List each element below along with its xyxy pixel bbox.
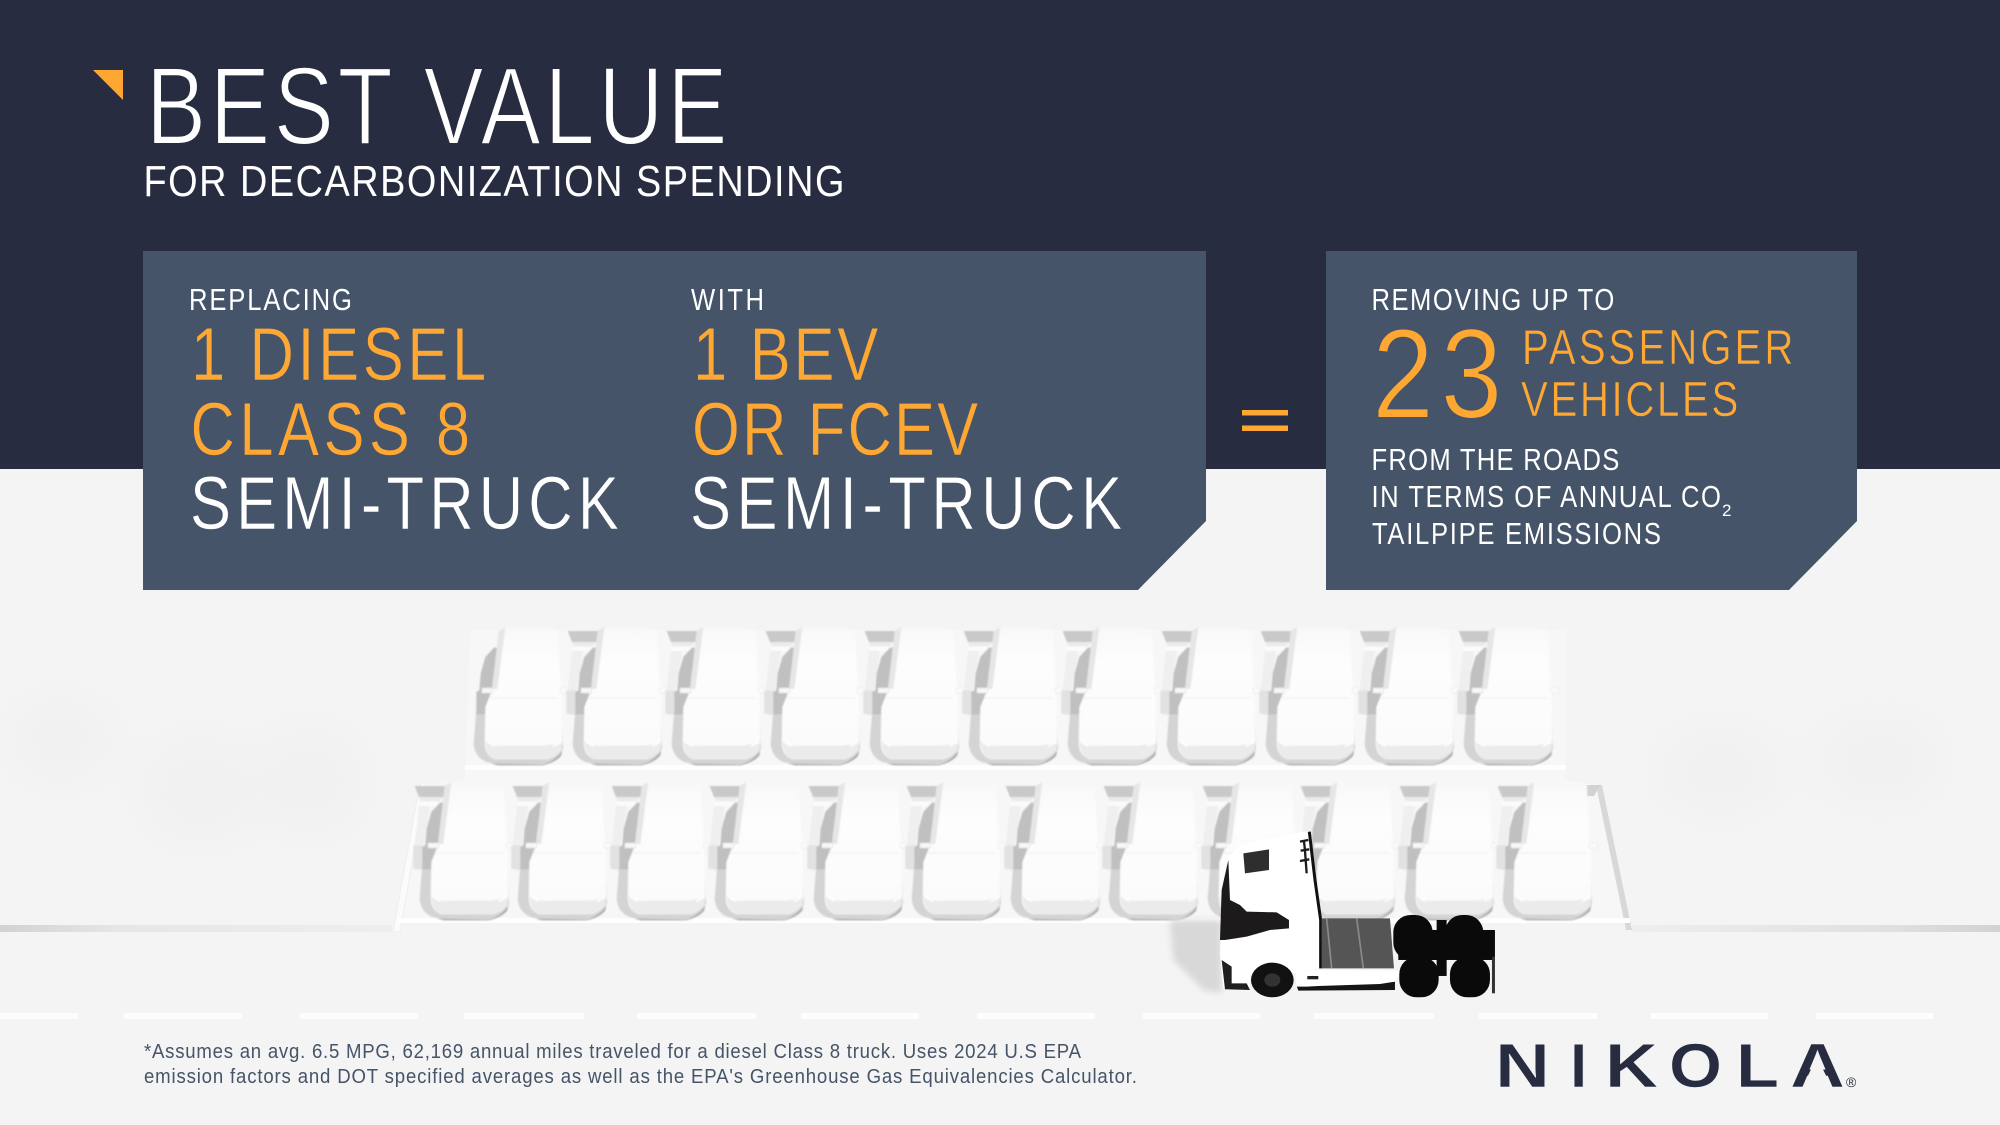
passenger vehicles [1521,320,1793,427]
diesel truck heading: SEMI-TRUCK [190,461,619,545]
ground haze texture [10,700,1940,840]
passenger vehicles: VEHICLES [1521,372,1738,427]
road lane dashes [0,1013,1933,1019]
label: removing up to: REMOVING UP TO [1372,283,1614,316]
description text: IN TERMS OF ANNUAL CO [1372,480,1721,513]
chassis [1295,970,1402,991]
front wheel [1251,963,1294,997]
logo: Nikola wordmark: ® [1846,1074,1857,1090]
truck cab [1220,832,1319,990]
parked cars: bottom row [413,782,1598,920]
truck ground shadow [1170,920,1222,993]
rear tires and axles [1393,915,1495,997]
cab vent marks [1300,840,1309,873]
logo: Nikola wordmark: O [1669,1032,1722,1101]
cab dark side [1220,860,1289,940]
parked cars: top row [474,627,1559,765]
BEV or FCEV truck heading: SEMI-TRUCK [690,461,1122,545]
logo: Nikola wordmark: N [1495,1032,1550,1101]
footnote: *Assumes an avg. 6.5 MPG, 62,169 annual miles traveled for a diesel Class 8 truck. Uses 2024 U.S EPA [144,1041,1081,1063]
description text: FROM THE ROADS [1372,443,1619,476]
big number 23: 23 [1372,303,1503,446]
footnote [144,1041,1137,1088]
panel: removing [1326,251,1857,590]
title: BEST VALUE [146,46,727,168]
label: with: WITH [691,283,764,316]
diesel truck heading: CLASS 8 [190,387,470,471]
footnote: emission factors and DOT specified averages as well as the EPA's Greenhouse Gas Equivalencies Calculator. [144,1066,1137,1088]
logo: Nikola wordmark [1495,1032,1857,1101]
dark header band [0,0,2000,469]
truck illustration [1170,832,1495,997]
passenger vehicles: PASSENGER [1522,320,1793,375]
BEV or FCEV truck heading: OR FCEV [692,387,978,471]
parking lot surface and edges [0,630,2000,932]
logo: Nikola wordmark: I [1570,1032,1587,1101]
subtitle: FOR DECARBONIZATION SPENDING [144,156,844,206]
diesel truck heading: 1 DIESEL [191,312,486,396]
logo: Nikola wordmark: K [1605,1032,1658,1101]
description text: 2 [1722,501,1731,520]
logo: Nikola wordmark: L [1736,1032,1779,1101]
description text: TAILPIPE EMISSIONS [1372,517,1661,550]
logo: Nikola wordmark: A [1790,1032,1845,1101]
cab rear edge [1309,832,1321,968]
cab roof window [1243,849,1269,873]
BEV or FCEV truck heading: 1 BEV [693,312,879,396]
icon: equals sign [1242,410,1288,431]
battery pack [1322,918,1394,968]
description text [1372,443,1731,550]
BEV or FCEV truck heading [690,312,1122,545]
front bumper detail [1222,960,1250,990]
panel: replacing with [143,251,1206,590]
label: replacing: REPLACING [189,283,352,316]
icon: orange corner triangle [93,70,123,100]
diesel truck heading [190,312,619,545]
